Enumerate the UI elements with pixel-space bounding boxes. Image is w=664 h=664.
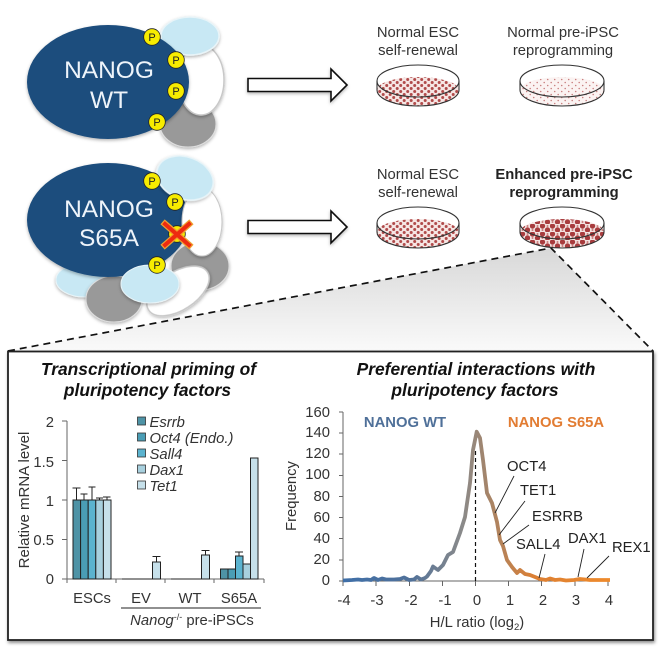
heading: transcriptional priming: pluripotency factors [63,380,231,400]
diagram: NANOG S65A complex [27,148,229,326]
factor labels [507,459,651,556]
group: EV bars [122,556,160,579]
dashed zero line [474,450,476,581]
x tick labels: 1 [506,593,514,609]
y tick labels: 20 [314,552,330,568]
group label: -/- [174,612,182,622]
legend: Tet1 [150,479,178,495]
icon: light blue partner top [151,148,219,208]
legend: Oct4 (Endo.) [150,431,233,447]
series label WT: NANOG WT [364,415,446,431]
y tick labels: 60 [314,510,330,526]
y tick labels: 0 [46,572,54,588]
group label: pre-iPSCs [182,613,254,629]
x tick labels: 3 [572,593,580,609]
text: Normal ESC self-renewal top: Normal ESC [377,25,459,41]
bar chart: relative mRNA level [16,415,264,629]
icon: phosphate sites [144,173,185,273]
callout: zoom cone from enhanced dish [8,248,653,351]
icon: phosphate sites: P [172,86,180,98]
heading: preferential interactions: pluripotency factors [390,380,559,400]
x axis title: ) [519,615,524,631]
icon: phosphate sites: P [148,32,156,44]
legend [138,415,233,495]
icon: grey partner right [171,242,229,290]
icon: grey partner protein [160,101,216,147]
label: NANOG: NANOG [64,196,154,223]
factor labels: DAX1 [568,531,607,547]
label: NANOG: NANOG [64,57,154,84]
icon: phosphate sites: P [153,117,161,129]
y tick labels: 40 [314,531,330,547]
group: WT bars [171,550,210,579]
series label S65A: NANOG S65A [508,415,604,431]
y tick labels: 1.5 [33,455,54,471]
y tick labels: 80 [314,489,330,505]
y tick labels [33,415,54,588]
text: Enhanced pre-iPSC reprogramming: reprogramming [509,185,619,201]
y axis title: Relative mRNA level [16,432,33,568]
y tick labels [305,405,330,589]
x labels: S65A [221,591,257,607]
y tick labels: 140 [305,425,330,441]
legend: Esrrb [150,415,185,431]
y tick labels: 0 [322,573,330,589]
arrow: WT to phenotypes [248,69,347,101]
x labels: EV [131,591,151,607]
icon: NANOG WT body [27,25,189,139]
x tick labels [337,593,613,609]
icon: light blue partner left [56,263,114,297]
heading: preferential interactions: Preferential interactions with [357,359,595,379]
x tick labels: -2 [404,593,418,609]
icon: light blue partner protein [161,17,219,55]
icon: dish pre-iPSC top [520,65,604,106]
label: WT: WT [90,87,128,114]
factor labels: REX1 [612,540,651,556]
group bracket line [121,607,261,609]
factor labels: SALL4 [516,537,560,553]
icon: phosphate sites: P [172,55,180,67]
icon: dish enhanced pre-iPSC [520,207,604,248]
icon: dish ESC top [377,65,459,106]
x labels: ESCs [73,591,111,607]
icon: white partner protein [178,45,224,115]
diagram: NANOG WT complex [27,17,224,147]
x tick labels: 0 [473,593,481,609]
heading: transcriptional priming: Transcriptional priming of [41,359,258,379]
y tick labels: 120 [305,446,330,462]
panel: detail box [8,352,653,640]
legend: Sall4 [150,447,182,463]
text: Enhanced pre-iPSC reprogramming: Enhanced pre-iPSC [495,167,633,183]
icon: phosphate sites [144,29,184,130]
y tick labels: 0.5 [33,533,54,549]
factor labels: TET1 [520,483,556,499]
text: Normal pre-iPSC reprogramming: Normal pre-iPSC [507,25,619,41]
x labels: WT [178,591,202,607]
x tick labels: -1 [438,593,452,609]
text: Normal ESC self-renewal bottom: self-renewal [378,185,458,201]
icon: white partner bottom [138,256,218,326]
icon: red cross over mutated site [165,224,189,245]
icon: white partner right [182,188,222,256]
icon: phosphate sites: P [171,197,179,209]
icon: dish ESC bottom [377,207,459,248]
axes [339,412,608,586]
x axis title: 2 [514,622,519,633]
group: ESCs bars [72,487,111,579]
x axis title: H/L ratio (log [430,615,514,631]
group label: Nanog [130,613,175,629]
icon: phosphate sites: P [148,176,156,188]
label: S65A: S65A [79,225,140,252]
leader lines [495,476,609,578]
x labels [73,591,257,607]
x tick labels: 2 [539,593,547,609]
x tick labels: -3 [370,593,384,609]
y tick labels: 1 [46,494,54,510]
axes [62,421,264,583]
y tick labels: 2 [46,415,54,431]
frequency curve [343,432,610,580]
x tick labels: 4 [605,593,613,609]
group: S65A bars [220,458,258,579]
y tick labels: 100 [305,467,330,483]
x tick labels: -4 [337,593,351,609]
text: Normal ESC self-renewal bottom: Normal ESC [377,167,459,183]
factor labels: ESRRB [532,509,583,525]
factor labels: OCT4 [507,459,546,475]
text: Normal pre-iPSC reprogramming: reprogramming [513,43,613,59]
icon: phosphate sites: P [153,260,161,272]
icon: light blue partner lower [121,265,179,303]
text: Normal ESC self-renewal top: self-renewal [378,43,458,59]
line chart: H/L ratio frequency [284,405,651,633]
y tick labels: 160 [305,405,330,421]
legend: Dax1 [150,463,184,479]
icon: grey partner bottom [86,276,142,322]
arrow: S65A to phenotypes [248,211,347,243]
icon: NANOG S65A body [27,163,189,277]
y axis title: Frequency [284,460,300,531]
